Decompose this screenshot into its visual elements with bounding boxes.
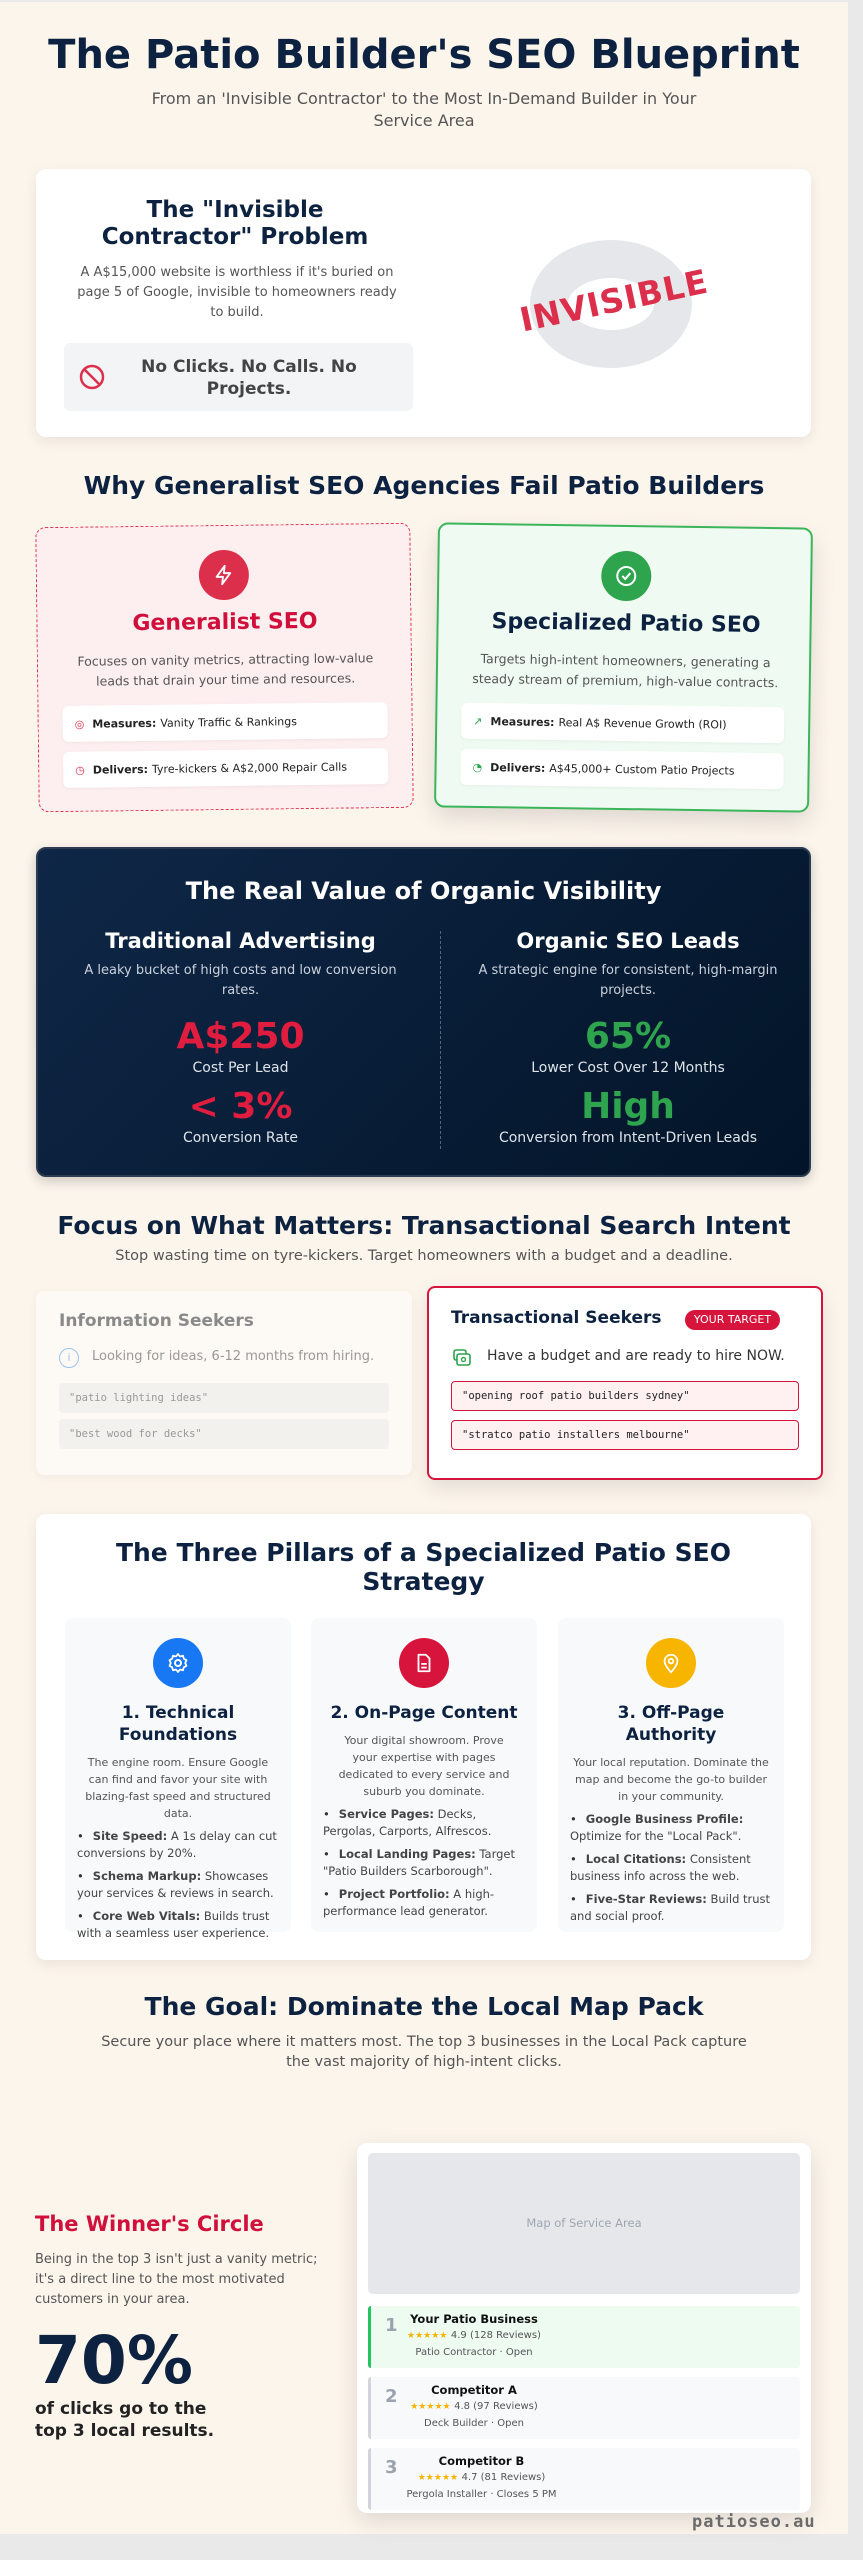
heading: three pillars: The Three Pillars of a Specialized Patio SEO Strategy <box>116 1538 731 1596</box>
icon: info: i <box>67 1351 71 1364</box>
pill: measures vanity <box>62 702 388 742</box>
panel: specialized patio SEO <box>434 522 813 813</box>
pill: measures vanity: ◎ <box>75 717 84 730</box>
pillar: technical: The engine room. Ensure Google can find and favor your site with blazing-fast speed and structured data. <box>85 1756 271 1820</box>
icon: invisible stamp <box>516 240 712 368</box>
result 2: ★★★★★ 4.8 (97 Reviews) <box>410 2401 538 2412</box>
pill: delivers projects: A$45,000+ Custom Patio Projects <box>549 761 735 777</box>
text: specialized description: Targets high-intent homeowners, generating a steady stream of premium, high-value contracts. <box>472 651 778 690</box>
result 2: 2 <box>385 2386 398 2407</box>
icon: info <box>59 1348 79 1368</box>
pillar: on-page: 2. On-Page Content <box>330 1703 518 1723</box>
icon: money <box>453 1349 471 1366</box>
panel: information seekers: Looking for ideas, 6-12 months from hiring. <box>92 1349 374 1364</box>
heading: invisible contractor <box>102 197 368 250</box>
callout: no clicks: No Clicks. No Calls. No Projects. <box>141 357 357 399</box>
pillar: technical: Site Speed: A 1s delay can cut conversions by 20%. <box>77 1829 277 1860</box>
column: traditional advertising: A$250 <box>176 1016 305 1057</box>
subtitle: From an 'Invisible Contractor' to the Most In-Demand Builder in Your Service Area <box>152 89 696 130</box>
icon: check <box>601 551 652 601</box>
pill: delivers projects <box>460 749 784 789</box>
text block: winner's circle: of clicks go to the <box>35 2399 206 2419</box>
text block: winner's circle <box>35 2212 318 2441</box>
title: The Patio Builder's SEO Blueprint <box>48 32 800 78</box>
pillar: technical: Core Web Vitals: Builds trust with a seamless user experience. <box>77 1909 269 1940</box>
panel: invisible contractor problem <box>36 169 811 437</box>
panel: three pillars <box>36 1514 811 1960</box>
panel: generalist SEO <box>35 523 414 812</box>
pillar: on-page <box>311 1618 537 1932</box>
column: organic SEO leads: 65% <box>585 1016 671 1057</box>
pill: delivers tyre-kickers: Tyre-kickers & A$2,000 Repair Calls <box>152 760 347 775</box>
result 1: Your Patio Business <box>410 2312 538 2326</box>
icon: invisible stamp: INVISIBLE <box>516 262 712 339</box>
column: organic SEO leads <box>478 929 778 1146</box>
text: map pack subtitle: Secure your place where it matters most. The top 3 businesses in the Local Pack capture the vast majority of high-intent clicks. <box>101 2034 747 2070</box>
pill: delivers projects: Delivers: <box>490 761 545 774</box>
heading: specialized: Specialized Patio SEO <box>491 609 761 638</box>
column: organic SEO leads: A strategic engine for consistent, high-margin projects. <box>478 963 778 998</box>
panel: transactional seekers: Have a budget and are ready to hire NOW. <box>487 1348 785 1364</box>
text: intent subtitle: Stop wasting time on tyre-kickers. Target homeowners with a budget and a deadline. <box>115 1248 733 1264</box>
pillar: off-page <box>558 1618 784 1932</box>
watermark: patioseo.au <box>692 2512 816 2532</box>
column: traditional advertising: Traditional Advertising <box>105 929 376 953</box>
map placeholder: Map of Service Area <box>526 2216 642 2230</box>
column: traditional advertising <box>84 929 397 1146</box>
pillar: off-page: Local Citations: Consistent business info across the web. <box>570 1852 751 1883</box>
panel: transactional seekers: "stratco patio installers melbourne" <box>462 1429 690 1441</box>
result 2: Competitor A <box>431 2383 517 2397</box>
badge: your target: YOUR TARGET <box>694 1313 771 1326</box>
icon: lightning <box>199 550 249 600</box>
column: traditional advertising: < 3% <box>189 1086 292 1127</box>
pill: measures vanity: Measures: <box>92 716 156 730</box>
heading: invisible contractor: The "Invisible <box>146 197 323 223</box>
pill: measures revenue: Real A$ Revenue Growth (ROI) <box>558 716 727 731</box>
column: traditional advertising: A leaky bucket of high costs and low conversion rates. <box>84 963 397 998</box>
text: generalist description: Focuses on vanity metrics, attracting low-value leads that drain your time and resources. <box>77 650 373 689</box>
icon: document <box>399 1638 449 1688</box>
pillar: off-page: Google Business Profile: Optimize for the "Local Pack". <box>570 1812 743 1843</box>
panel: information seekers <box>36 1291 412 1475</box>
text block: winner's circle: Being in the top 3 isn't just a vanity metric; it's a direct line to the most motivated customers in your area. <box>35 2252 318 2307</box>
panel: transactional seekers: "opening roof patio builders sydney" <box>462 1390 690 1402</box>
pillar: on-page: Your digital showroom. Prove your expertise with pages dedicated to every service and suburb you dominate. <box>339 1734 509 1798</box>
pillar: technical <box>65 1618 291 1932</box>
text: problem description: A A$15,000 website is worthless if it's buried on page 5 of Google, invisible to homeowners ready to build. <box>77 265 397 320</box>
result 3: Competitor B <box>439 2454 524 2468</box>
panel: information seekers: Information Seekers <box>59 1311 254 1331</box>
heading: generalist SEO: Generalist SEO <box>132 609 318 636</box>
panel: information seekers: "patio lighting ideas" <box>69 1392 208 1404</box>
pillar: technical: Schema Markup: Showcases your services & reviews in search. <box>77 1869 274 1900</box>
pill: delivers tyre-kickers <box>63 748 388 788</box>
text block: winner's circle: top 3 local results. <box>35 2421 214 2441</box>
result 3: 3 <box>385 2457 398 2478</box>
panel: transactional seekers <box>427 1286 823 1480</box>
result 2: Deck Builder · Open <box>424 2418 524 2429</box>
pillar: on-page: Project Portfolio: A high-performance lead generator. <box>323 1887 494 1918</box>
pillar: off-page: 3. Off-Page Authority <box>618 1703 724 1745</box>
column: organic SEO leads: Lower Cost Over 12 Months <box>531 1060 725 1076</box>
heading: invisible contractor: Contractor" Problem <box>102 224 368 250</box>
panel: real value of organic visibility <box>36 847 811 1177</box>
pill: measures revenue: Measures: <box>490 715 555 729</box>
pill: measures revenue <box>461 703 784 743</box>
column: traditional advertising: Conversion Rate <box>183 1130 298 1146</box>
pillar: on-page: Service Pages: Decks, Pergolas, Carports, Alfrescos. <box>323 1807 491 1838</box>
panel: map pack mockup <box>357 2143 811 2513</box>
result 3 <box>368 2448 800 2510</box>
callout: no clicks <box>64 343 413 411</box>
column: organic SEO leads: Conversion from Intent-Driven Leads <box>499 1130 757 1146</box>
map placeholder <box>368 2153 800 2294</box>
column: organic SEO leads: High <box>581 1086 675 1127</box>
pill: delivers tyre-kickers: ◷ <box>75 763 85 776</box>
pillar: off-page: Your local reputation. Dominate the map and become the go-to builder in your community. <box>573 1756 769 1803</box>
icon: gear <box>153 1638 203 1688</box>
heading: real value: The Real Value of Organic Visibility <box>186 877 661 905</box>
pillar: on-page: Local Landing Pages: Target "Patio Builders Scarborough". <box>323 1847 515 1878</box>
icon: map pin <box>646 1638 696 1688</box>
column: organic SEO leads: Organic SEO Leads <box>516 929 740 953</box>
result 1: Patio Contractor · Open <box>415 2347 533 2358</box>
pill: delivers projects: ◔ <box>473 760 482 774</box>
pillar: off-page: Five-Star Reviews: Build trust and social proof. <box>570 1892 770 1923</box>
result 2 <box>368 2377 800 2439</box>
panel: information seekers: "best wood for decks" <box>69 1428 202 1440</box>
heading: why generalist agencies fail: Why Generalist SEO Agencies Fail Patio Builders <box>84 471 764 500</box>
result 1: ★★★★★ 4.9 (128 Reviews) <box>407 2330 541 2341</box>
result 3: Pergola Installer · Closes 5 PM <box>406 2489 557 2500</box>
result 1 <box>368 2306 800 2368</box>
pill: delivers tyre-kickers: Delivers: <box>93 762 148 776</box>
result 1: 1 <box>385 2315 398 2336</box>
heading: local map pack: The Goal: Dominate the Local Map Pack <box>145 1992 703 2021</box>
stat: 70%: 70% <box>35 2322 193 2399</box>
divider <box>440 931 441 1149</box>
panel: transactional seekers: Transactional Seekers <box>451 1308 662 1328</box>
pillar: technical: 1. Technical Foundations <box>119 1703 237 1745</box>
badge: your target <box>685 1310 780 1330</box>
column: traditional advertising: Cost Per Lead <box>192 1060 288 1076</box>
heading: transactional intent: Focus on What Matters: Transactional Search Intent <box>57 1211 791 1240</box>
pill: measures revenue: ↗ <box>473 714 483 728</box>
icon: prohibited <box>80 364 104 390</box>
pill: measures vanity: Vanity Traffic & Rankings <box>160 715 297 729</box>
text block: winner's circle: The Winner's Circle <box>35 2212 264 2236</box>
result 3: ★★★★★ 4.7 (81 Reviews) <box>418 2472 545 2483</box>
